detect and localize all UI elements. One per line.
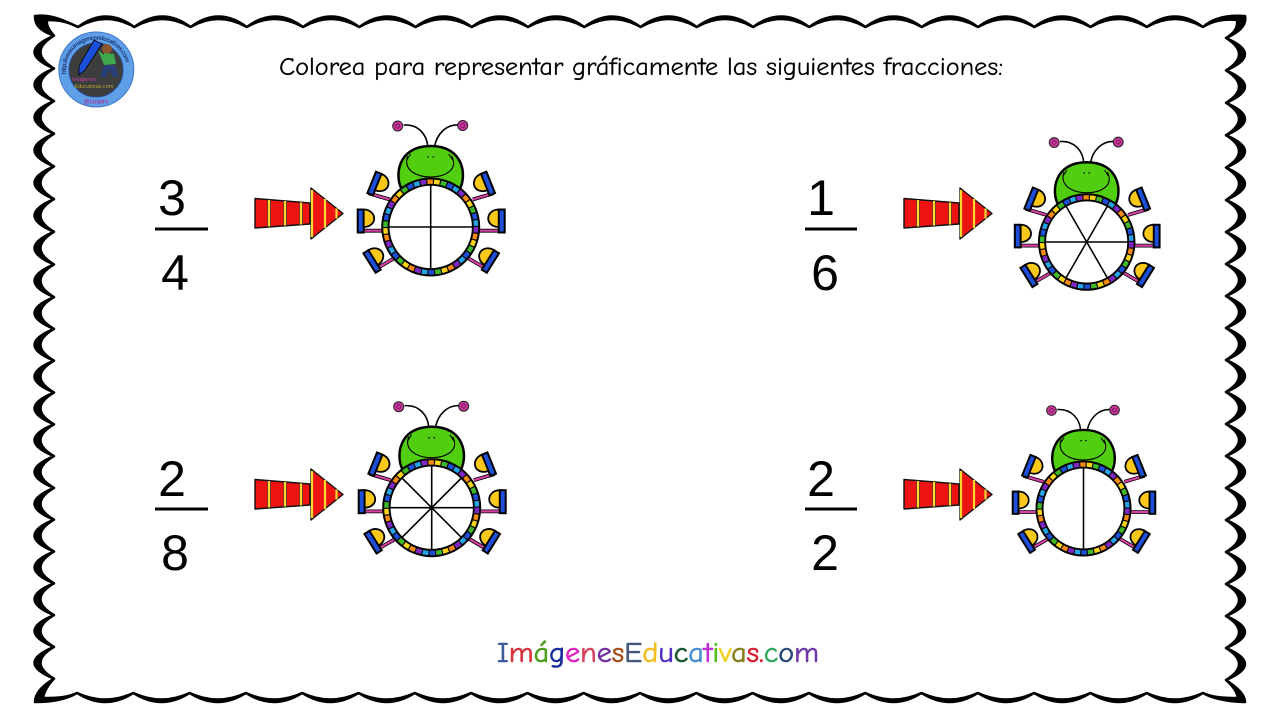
logo badge: Imágenes [72, 77, 96, 83]
logo badge [58, 32, 134, 108]
fraction 2/2 [805, 451, 857, 581]
bug with circle in 4 parts [358, 120, 505, 276]
fraction 3/4 [155, 170, 208, 301]
fraction 1/6: 6 [811, 245, 839, 301]
arrow 3 [255, 469, 343, 520]
fraction 3/4: 4 [161, 245, 189, 301]
logo badge: @cuadro [84, 100, 109, 106]
bug with circle in 6 parts [1015, 137, 1160, 291]
footer website wordmark: ImágenesEducativas.com [497, 637, 819, 669]
fraction 1/6 [805, 170, 857, 301]
fraction 2/8 [155, 451, 208, 581]
arrow 2 [904, 188, 992, 239]
arrow 4 [904, 469, 992, 520]
fraction 2/8: 2 [158, 451, 186, 507]
bug with circle in 8 parts [359, 401, 506, 557]
fraction 1/6: 1 [807, 170, 835, 226]
arrow 1 [255, 188, 343, 239]
bug with circle in 2 parts [1013, 405, 1155, 557]
title: Colorea para representar gráficamente las siguientes fracciones: [279, 53, 1003, 82]
fraction 3/4: 3 [158, 170, 186, 226]
logo badge: http://www.imageneseducativas.com [61, 36, 129, 74]
fraction 2/8: 8 [161, 525, 189, 581]
logo badge: Educativas.com [75, 84, 114, 90]
fraction 2/2: 2 [807, 451, 835, 507]
fraction 2/2: 2 [811, 525, 839, 581]
